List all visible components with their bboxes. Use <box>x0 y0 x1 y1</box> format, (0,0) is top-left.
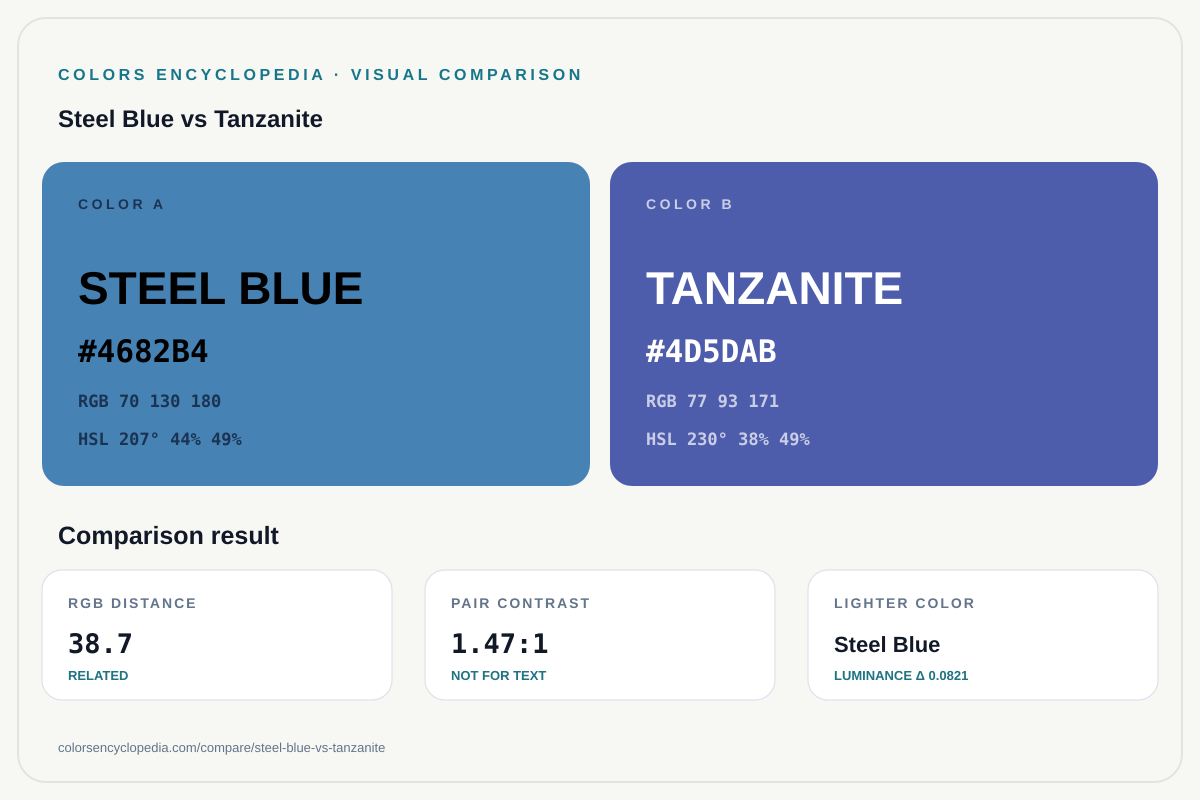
card value: Steel Blue <box>834 632 940 657</box>
color A hsl: HSL 207° 44% 49% <box>78 430 242 450</box>
card: pair contrast <box>424 570 776 700</box>
card label: PAIR CONTRAST <box>451 595 591 611</box>
color B hsl: HSL 230° 38% 49% <box>646 430 810 450</box>
eyebrow heading: COLORS ENCYCLOPEDIA · VISUAL COMPARISON <box>58 67 584 84</box>
card: RGB distance <box>42 570 392 700</box>
title: Steel Blue vs Tanzanite <box>58 106 323 133</box>
card note: RELATED <box>68 668 128 683</box>
color A rgb: RGB 70 130 180 <box>78 392 221 412</box>
card label: RGB DISTANCE <box>68 595 198 611</box>
section heading: Comparison result <box>58 522 279 550</box>
color A name: STEEL BLUE <box>78 262 363 314</box>
color A hex: #4682B4 <box>78 334 209 370</box>
color B rgb: RGB 77 93 171 <box>646 392 779 412</box>
footer url: colorsencyclopedia.com/compare/steel-blue-vs-tanzanite <box>58 740 385 755</box>
card: lighter color <box>808 570 1158 700</box>
card label: LIGHTER COLOR <box>834 595 976 611</box>
color B label: COLOR B <box>646 196 735 212</box>
card value: 1.47:1 <box>451 629 549 660</box>
card note: LUMINANCE Δ 0.0821 <box>834 668 968 683</box>
color A label: COLOR A <box>78 196 167 212</box>
color B hex: #4D5DAB <box>646 334 777 370</box>
color B name: TANZANITE <box>646 262 903 314</box>
panel: color A <box>42 162 590 486</box>
card note: NOT FOR TEXT <box>451 668 546 683</box>
card value: 38.7 <box>68 629 133 660</box>
panel: color B <box>610 162 1158 486</box>
